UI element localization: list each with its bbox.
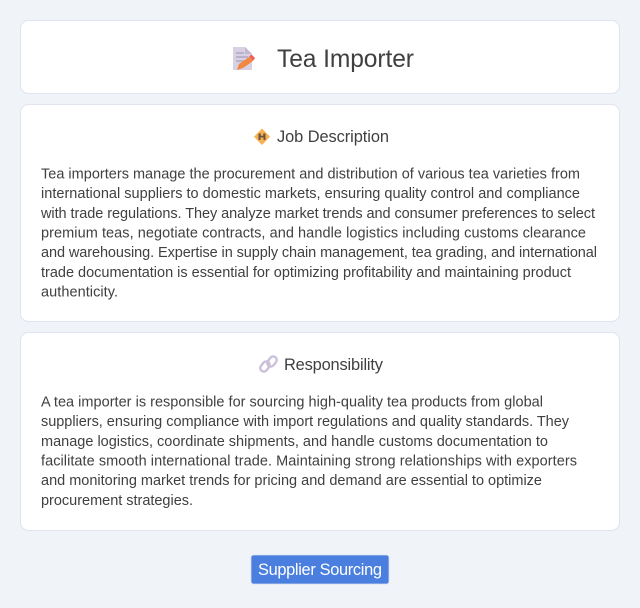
responsibility heading: Responsibility — [284, 356, 384, 374]
responsibility text: facilitate smooth international trade. Maintaining strong relationships with exporters — [41, 454, 577, 470]
responsibility text: procurement strategies. — [41, 493, 193, 509]
panel: job description — [20, 104, 620, 322]
button: Supplier Sourcing: Supplier Sourcing — [258, 561, 382, 579]
button: Supplier Sourcing — [251, 555, 389, 584]
icon: document with pencil — [233, 47, 255, 70]
responsibility text — [41, 394, 577, 509]
job description text: international suppliers to domestic markets, ensuring quality control and compliance — [41, 186, 580, 202]
job description text: premium teas, negotiate contracts, and handle logistics including customs clearance — [41, 226, 586, 242]
job description text: authenticity. — [41, 284, 118, 300]
panel: responsibility — [20, 332, 620, 530]
job description text: Tea importers manage the procurement and distribution of various tea varieties from — [41, 166, 580, 182]
responsibility text: manage logistics, coordinate shipments, and handle customs documentation to — [41, 434, 548, 450]
title text: Tea Importer — [277, 46, 414, 73]
job description text: trade documentation is essential for optimizing profitability and maintaining product — [41, 265, 571, 281]
icon: chain link — [259, 355, 278, 373]
job description text: with trade regulations. They analyze market trends and consumer preferences to select — [40, 206, 595, 222]
job description text — [40, 166, 597, 300]
job description text: and warehousing. Expertise in supply chain management, tea grading, and international — [41, 245, 597, 261]
responsibility text: A tea importer is responsible for sourcing high-quality tea products from global — [41, 394, 543, 410]
panel: title — [20, 20, 620, 94]
responsibility text: suppliers, ensuring compliance with import regulations and quality standards. They — [41, 414, 570, 430]
icon: orange diamond — [254, 128, 270, 145]
job description heading: Job Description — [277, 128, 389, 146]
responsibility text: and monitoring market trends for pricing and demand are essential to optimize — [41, 473, 542, 489]
